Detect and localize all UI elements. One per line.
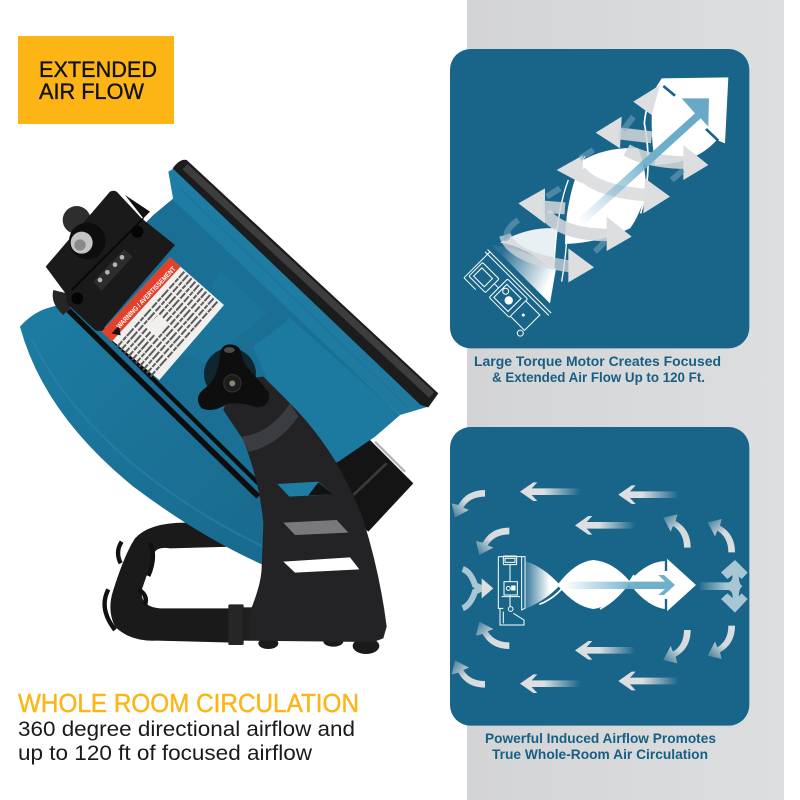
intake arrows at fan rear <box>463 569 493 608</box>
heading: whole room circulation: WHOLE ROOM CIRCULATION <box>18 690 359 718</box>
rear flange <box>20 297 267 565</box>
warning label: WARNING / AVERTISSEMENT <box>116 265 178 330</box>
badge: extended air flow: EXTENDED <box>39 57 157 82</box>
warning label <box>102 257 224 380</box>
caption: powerful induced airflow <box>485 730 716 762</box>
caption: large torque motor: Large Torque Motor Creates Focused <box>474 353 721 369</box>
central blue arrow <box>577 98 709 227</box>
return airflow arrows: curved <box>452 490 735 688</box>
caption: powerful induced airflow: Powerful Induced Airflow Promotes <box>485 730 716 746</box>
body text: whole room circulation <box>18 717 355 765</box>
badge: extended air flow <box>18 36 174 124</box>
panel: focused air flow diagram <box>450 49 749 348</box>
motor housing at rear <box>333 435 413 532</box>
fan body <box>67 198 400 497</box>
fan outline icon <box>498 556 525 625</box>
outflow split arrows <box>700 560 748 613</box>
badge: extended air flow: AIR FLOW <box>39 79 145 104</box>
tension knob <box>198 344 269 410</box>
body text: whole room circulation: 360 degree directional airflow and <box>18 717 355 741</box>
airflow helix <box>492 77 728 303</box>
body text: whole room circulation: up to 120 ft of focused airflow <box>18 741 312 765</box>
fan outline icon <box>460 249 552 341</box>
central blue arrow <box>563 575 675 595</box>
caption: large torque motor <box>474 353 721 385</box>
power cord <box>68 305 263 497</box>
control box <box>46 191 175 331</box>
handle <box>105 523 253 645</box>
return airflow arrows: straight <box>520 482 678 693</box>
grey background column <box>467 0 784 800</box>
front black rim <box>173 160 438 407</box>
black stand bracket <box>223 377 387 654</box>
panel: whole room circulation diagram <box>450 427 749 726</box>
front flange <box>168 165 428 415</box>
caption: powerful induced airflow: True Whole-Room Air Circulation <box>492 746 708 762</box>
tension knob base <box>204 348 256 400</box>
central airflow helix <box>525 558 696 612</box>
product photo: blue tilting fan <box>20 160 438 654</box>
caption: large torque motor: & Extended Air Flow Up to 120 Ft. <box>492 369 705 385</box>
circular airflow arrows <box>505 85 708 282</box>
